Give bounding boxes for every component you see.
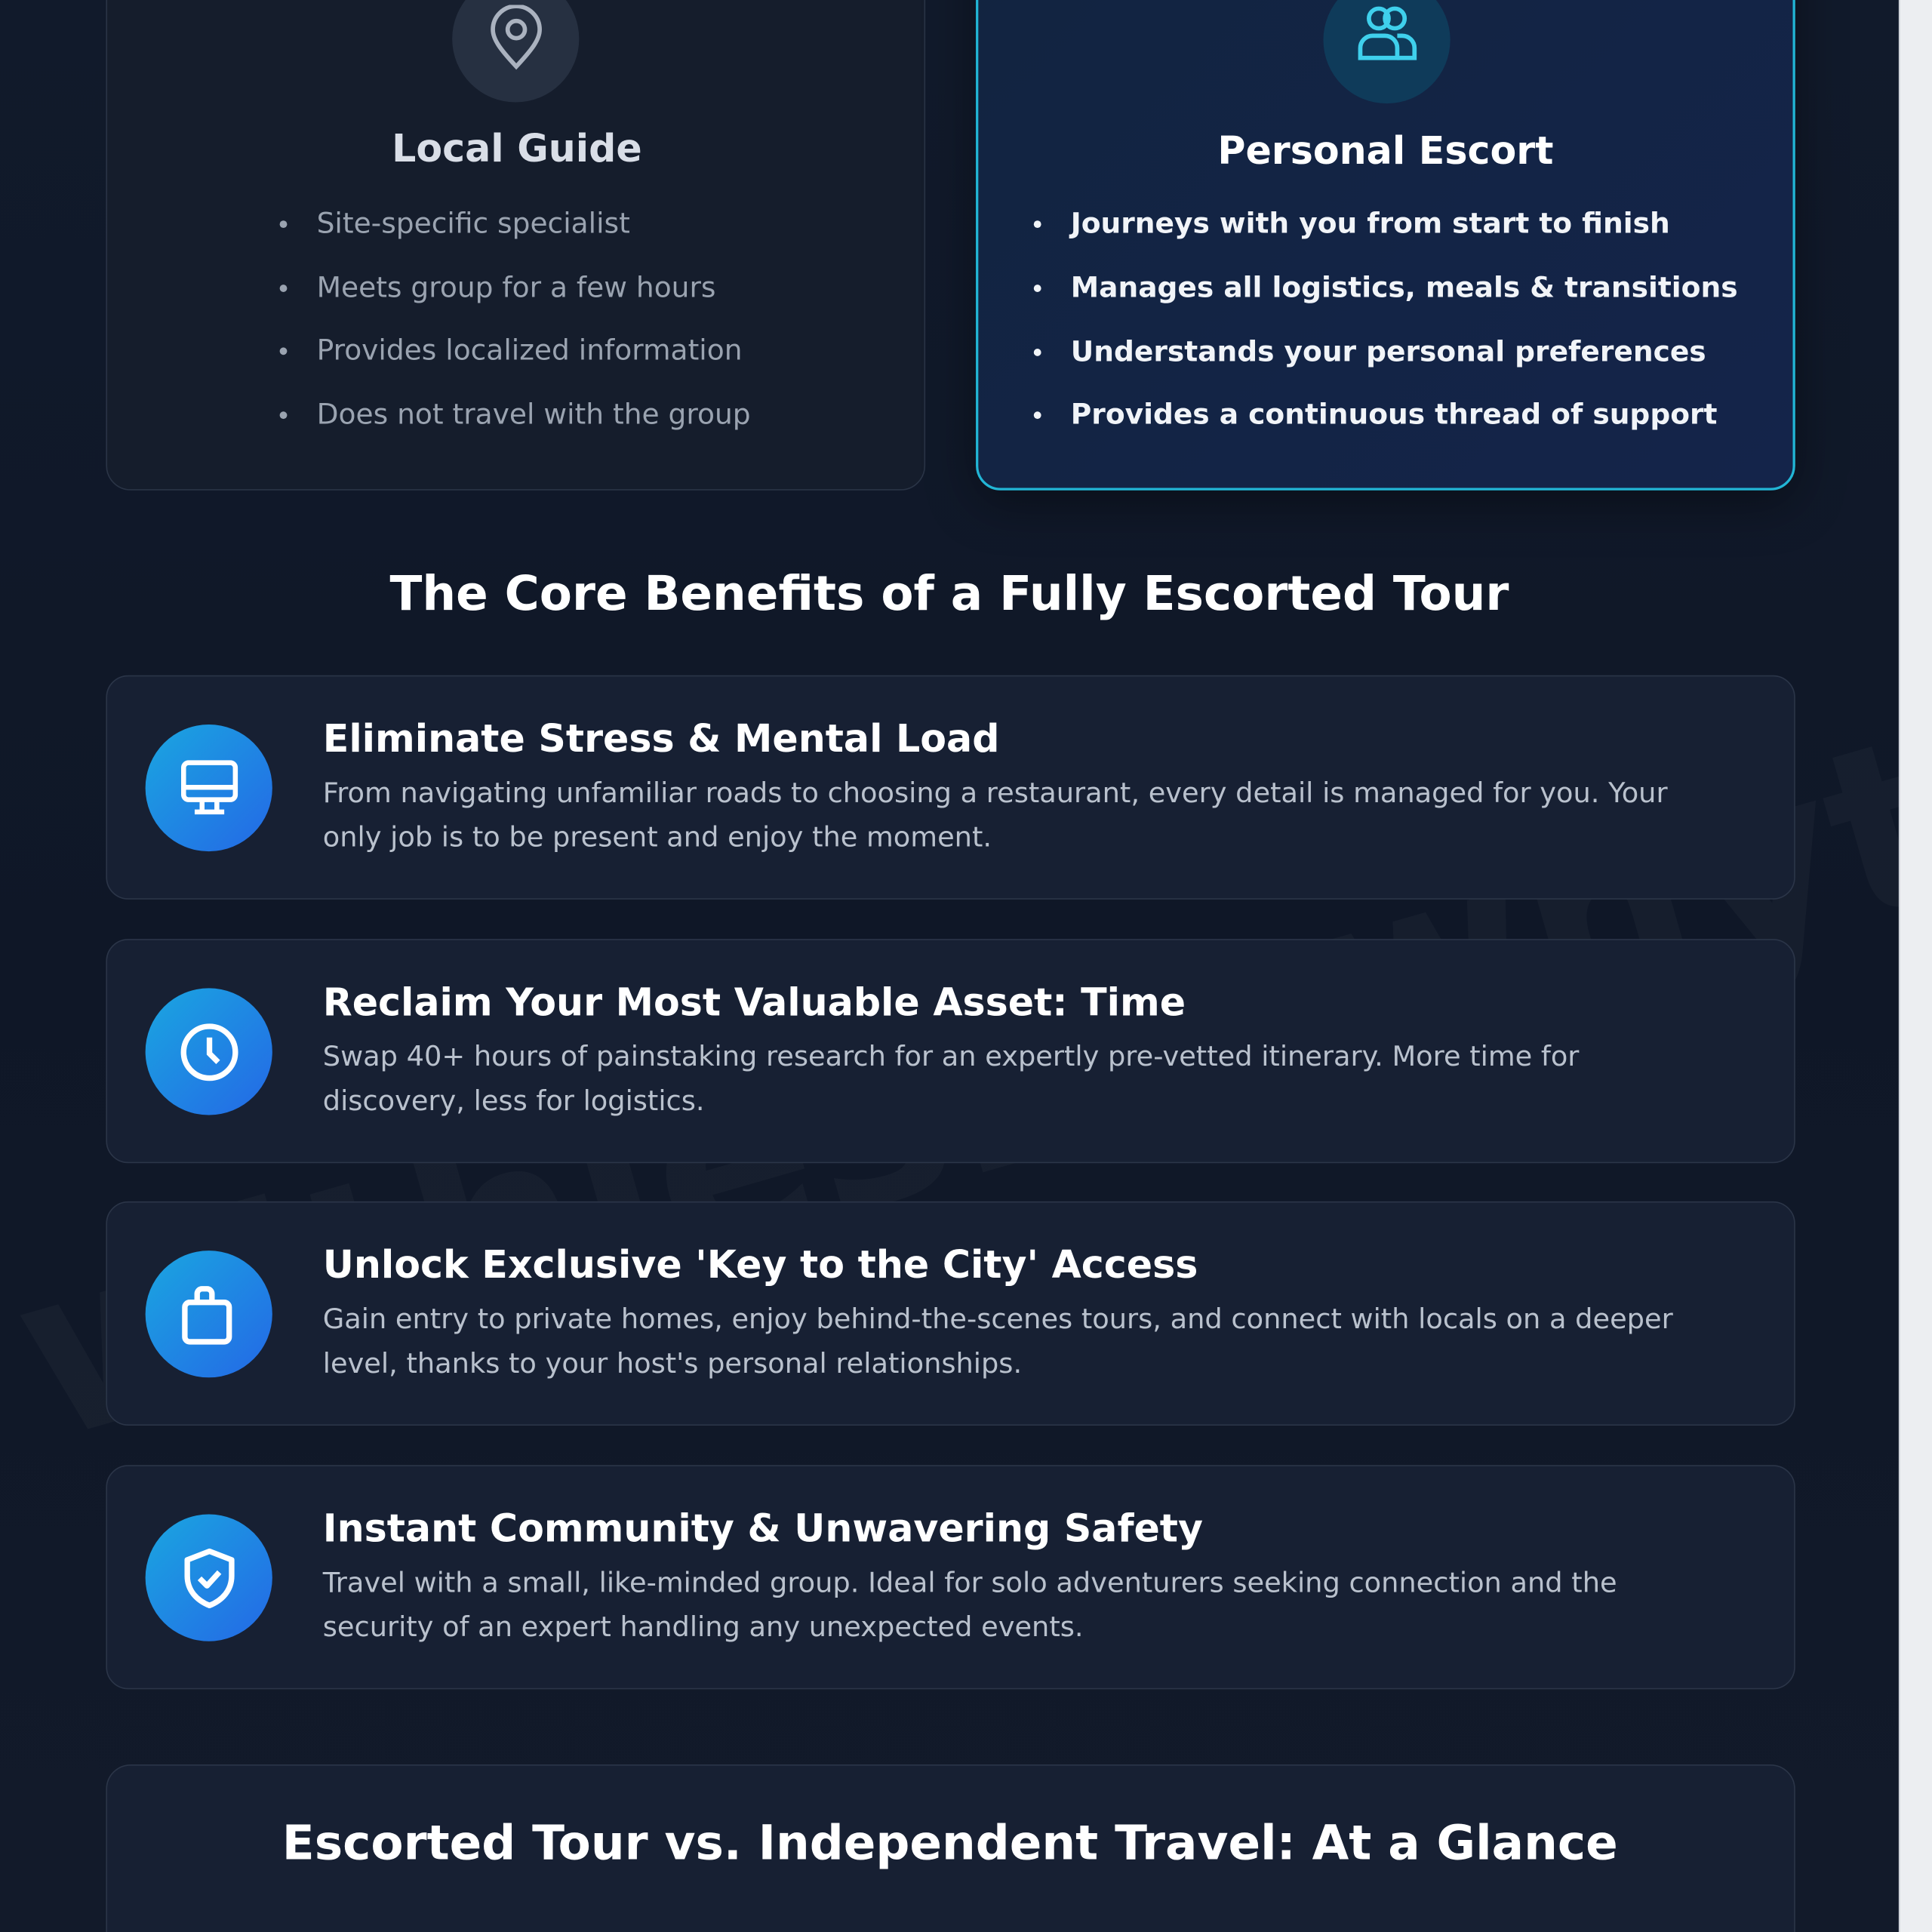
panel: local guide [106,0,925,491]
benefit: exclusive access [106,1201,1795,1426]
title: personal escort: Personal Escort [1217,129,1553,174]
icon: map pin [452,0,579,103]
benefit: reclaim time: Swap 40+ hours of painstaking research for an expertly pre-vetted itinerary. More time for discovery, less for logistics. [323,1041,1579,1118]
icon: clock [146,988,272,1115]
icon: people [1323,0,1451,103]
panel: personal escort: Provides a continuous thread of support [1071,399,1717,431]
title: local guide: Local Guide [392,127,642,171]
benefit: community & safety: Instant Community & Unwavering Safety [323,1507,1203,1552]
panel: local guide: Meets group for a few hours [317,272,715,304]
benefit: exclusive access: Unlock Exclusive 'Key to the City' Access [323,1243,1198,1287]
benefit: exclusive access: Gain entry to private homes, enjoy behind-the-scenes tours, and connect with locals on a deeper level, thanks to your host's personal relationships. [323,1303,1673,1380]
list: local guide [279,208,751,431]
panel: personal escort: Manages all logistics, meals & transitions [1071,272,1738,304]
benefit: eliminate stress: From navigating unfamiliar roads to choosing a restaurant, every detail is managed for you. Your only job is to be present and enjoy the moment. [323,777,1668,854]
icon: monitor [146,724,272,851]
icon: bag [146,1251,272,1377]
panel: comparison [106,1764,1795,1932]
benefit: eliminate stress: Eliminate Stress & Mental Load [323,717,999,761]
panel: local guide: Does not travel with the group [317,399,751,431]
benefit: community & safety: Travel with a small, like-minded group. Ideal for solo adventurers seeking connection and the security of an expert handling any unexpected events. [323,1567,1617,1644]
panel: personal escort: Understands your personal preferences [1071,337,1706,368]
panel: local guide: Site-specific specialist [317,208,630,240]
benefit: community & safety [106,1465,1795,1689]
panel: local guide: Provides localized information [317,335,743,368]
list: personal escort [1034,208,1738,431]
panel: personal escort [976,0,1795,491]
right edge strip [1899,0,1932,1932]
benefit: reclaim time [106,939,1795,1163]
icon: shield [146,1515,272,1641]
panel: personal escort: Journeys with you from start to finish [1071,208,1670,240]
heading: core benefits: The Core Benefits of a Fully Escorted Tour [390,567,1509,622]
benefit: reclaim time: Reclaim Your Most Valuable Asset: Time [323,981,1186,1025]
benefit: eliminate stress [106,675,1795,900]
heading: comparison: Escorted Tour vs. Independent Travel: At a Glance [282,1817,1618,1872]
